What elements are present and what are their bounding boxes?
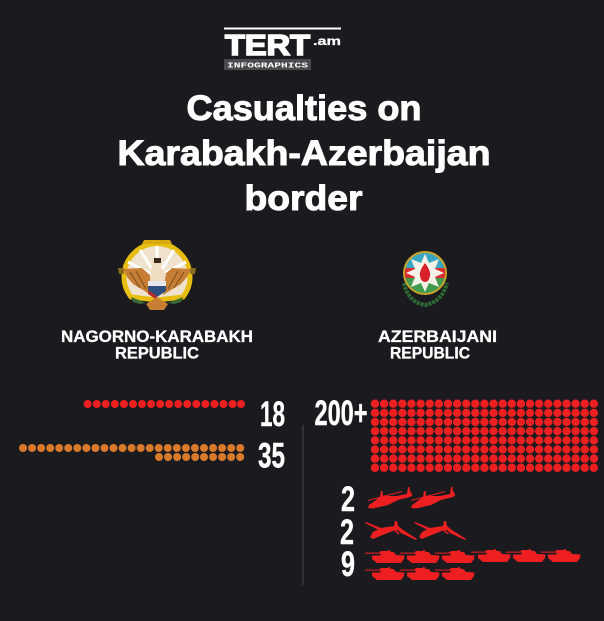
logo: TERT.am infographics bbox=[224, 28, 341, 70]
icons: tanks bbox=[365, 549, 580, 580]
number: 9 tanks: 9 bbox=[341, 545, 355, 584]
title bbox=[118, 89, 490, 218]
divider bbox=[302, 425, 304, 585]
dots: Azerbaijan 200+ killed bbox=[371, 400, 598, 472]
dots: Karabakh 35 wounded bbox=[19, 444, 244, 461]
icons: drones bbox=[365, 521, 466, 540]
icon: Azerbaijan coat of arms bbox=[403, 251, 447, 305]
number: 200+: 200+ bbox=[314, 394, 368, 433]
logo: TERT.am infographics: .am bbox=[313, 34, 341, 48]
heading: Nagorno-Karabakh Republic: NAGORNO-KARABAKH bbox=[61, 328, 253, 346]
dots: Karabakh 18 killed bbox=[84, 400, 245, 408]
number: 18: 18 bbox=[260, 395, 285, 434]
heading: Nagorno-Karabakh Republic: REPUBLIC bbox=[115, 344, 199, 362]
number: 2 helicopters: 2 bbox=[341, 480, 355, 519]
heading: Azerbaijani Republic: REPUBLIC bbox=[390, 344, 470, 362]
icons: helicopters bbox=[368, 487, 456, 508]
logo: TERT.am infographics: INFOGRAPHICS bbox=[227, 62, 309, 70]
icon: Nagorno-Karabakh coat of arms bbox=[118, 240, 196, 310]
title: Karabakh-Azerbaijan bbox=[118, 134, 490, 173]
title: border bbox=[244, 179, 363, 218]
number: 35: 35 bbox=[258, 436, 285, 476]
heading: Nagorno-Karabakh Republic bbox=[61, 328, 253, 362]
logo: TERT.am infographics: TERT bbox=[225, 30, 310, 62]
heading: Azerbaijani Republic bbox=[378, 328, 497, 362]
number: 2 aircraft: 2 bbox=[340, 513, 354, 552]
heading: Azerbaijani Republic: AZERBAIJANI bbox=[378, 328, 497, 346]
title: Casualties on bbox=[186, 89, 422, 128]
